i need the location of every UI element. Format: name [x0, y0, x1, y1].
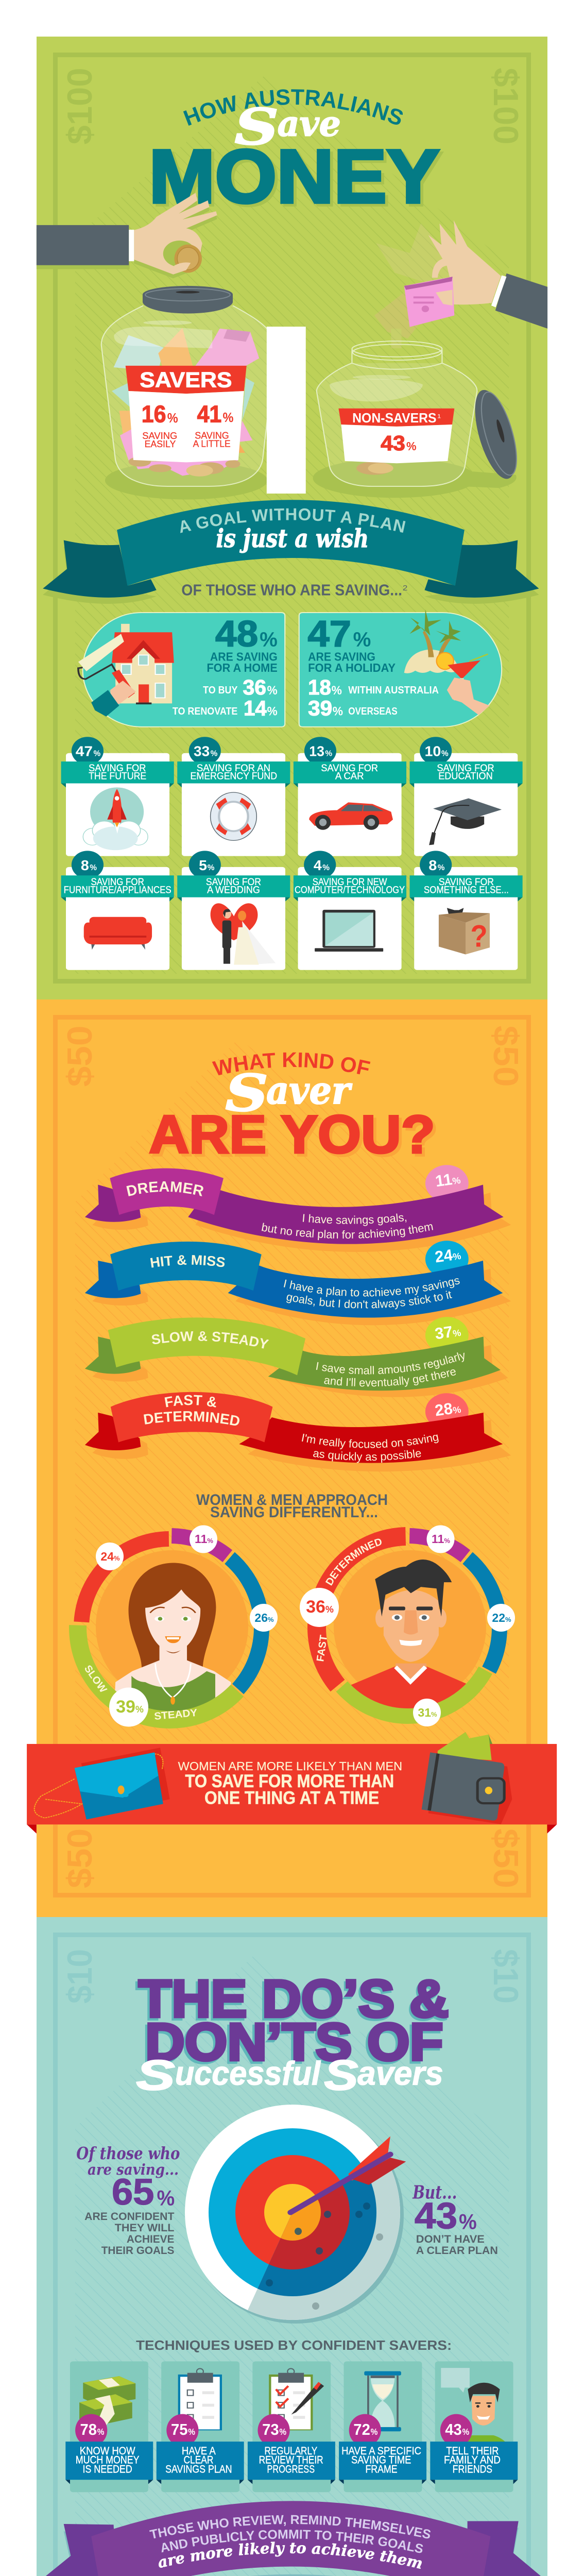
panel: the do's and don'ts of successful savers (teal): $10	[486, 1949, 525, 2004]
panel: what kind of saver are you (orange): $50	[60, 1025, 99, 1087]
technique: tell their family and friends	[430, 2414, 518, 2484]
title: the do's and don'ts of successful savers	[136, 1970, 449, 2099]
ribbon text: saver types: but no real plan for achieving them	[262, 1223, 433, 1241]
heading: women and men approach saving differently: WOMEN & MEN APPROACH	[196, 1492, 388, 1509]
technique card backgrounds and icons	[70, 2361, 513, 2492]
technique: know how much money is needed: 78	[80, 2421, 97, 2438]
text: 43% don't have a clear plan: %	[459, 2209, 477, 2234]
icon: man talking	[441, 2368, 513, 2459]
banner: a goal without a plan	[43, 500, 539, 604]
card: saving for something else: SAVING FOR	[439, 876, 494, 888]
card: saving for education: SAVING FOR	[437, 762, 494, 773]
card: saving for a wedding	[177, 851, 290, 970]
title: what kind of saver are you: aver	[266, 1069, 352, 1113]
card: saving for a car: SAVING FOR	[321, 762, 378, 773]
ribbon text: saver types: 11%	[434, 1169, 461, 1190]
illustration: savers jar: SAVING	[195, 431, 229, 441]
chart: women's saver types: STEADY	[154, 1707, 198, 1722]
text: 65% are confident: %	[157, 2185, 175, 2210]
technique: have a clear savings plan	[157, 2414, 244, 2484]
illustration: savers jar: 16	[142, 401, 166, 428]
card: saving for a wedding: %	[208, 862, 215, 872]
icon: grey wallet	[422, 1752, 512, 1824]
card: new computer or technology	[294, 851, 406, 970]
icon: mystery box with cat	[439, 908, 490, 955]
chart: women's saver types: 24%	[100, 1550, 120, 1563]
illustration: savers jar: %	[222, 410, 233, 425]
ribbon: hit and miss	[85, 1241, 511, 1325]
ribbon text: saver types: 24%	[434, 1245, 462, 1266]
ribbon text: saver types: I have savings goals,	[303, 1214, 407, 1226]
text: 65% are confident: ACHIEVE	[127, 2232, 174, 2245]
text: 65% are confident: THEY WILL	[115, 2221, 174, 2233]
chart: women's saver types: 11%	[195, 1532, 213, 1546]
heading: women and men approach saving differently	[196, 1492, 388, 1521]
technique: have a clear savings plan: 75	[171, 2421, 187, 2438]
text: 65% are confident: ARE CONFIDENT	[84, 2210, 174, 2223]
panel: saving for a home: 14	[244, 696, 267, 720]
icon: blank checklist	[178, 2368, 222, 2430]
chart: men's saver types: DETERMINED	[325, 1538, 382, 1586]
chart: men's saver types	[300, 1525, 515, 1726]
text: 65% are confident: are saving...	[88, 2161, 179, 2179]
icon: red car	[309, 802, 393, 830]
title: how Australians save money	[149, 89, 444, 222]
title: how Australians save money: HOW AUSTRALIANS	[183, 89, 403, 126]
panel: saving for a home: FOR A HOME	[207, 662, 278, 675]
technique: know how much money is needed: KNOW HOW	[80, 2444, 135, 2457]
text: women more likely	[178, 1760, 402, 1808]
text: women more likely: ONE THING AT A TIME	[204, 1788, 379, 1808]
card: new computer or technology: COMPUTER/TECHNOLOGY	[295, 884, 405, 895]
ribbon text: saver types: 28%	[434, 1398, 462, 1419]
panel: saving for a holiday: %	[353, 628, 371, 651]
panel: what kind of saver are you (orange): $50	[60, 1828, 99, 1888]
banner text: those who review, remind and commit: AND PUBLICLY COMMIT TO THEIR GOALS	[162, 2530, 423, 2553]
title: how Australians save money: S	[235, 98, 279, 156]
ribbon text: saver types: SLOW & STEADY	[151, 1331, 269, 1349]
panel: saving for a home	[78, 613, 285, 727]
title: what kind of saver are you: ARE YOU?	[152, 1107, 438, 1167]
panel: what kind of saver are you (orange)	[27, 999, 557, 1917]
chart: women's saver types: SLOW	[82, 1663, 109, 1695]
card: emergency fund: %	[211, 749, 217, 758]
panel: saving for a home: TO RENOVATE	[173, 705, 237, 717]
ribbon text: saver types: DETERMINED	[144, 1411, 239, 1426]
panel: saving for a home: %	[267, 704, 278, 718]
technique: tell their family and friends: TELL THEIR	[446, 2444, 499, 2457]
text: 43% don't have a clear plan: A CLEAR PLAN	[416, 2244, 498, 2256]
card: saving for a car: A CAR	[335, 770, 364, 782]
title: the do's and don'ts of successful savers: S	[324, 2051, 358, 2099]
banner: those who review	[40, 2501, 542, 2576]
card: saving for the future	[61, 737, 174, 856]
banner text: those who review, remind and commit: THOSE WHO REVIEW, REMIND THEMSELVES	[149, 2515, 431, 2539]
ribbon text: saver types: I'm really focused on saving	[302, 1433, 439, 1449]
icon: graduation cap	[429, 799, 502, 845]
technique: regularly review their progress: %	[279, 2427, 286, 2437]
title: the do's and don'ts of successful savers: avers	[357, 2054, 443, 2092]
illustration: savers jar: 41	[197, 401, 221, 428]
card: emergency fund: SAVING FOR AN	[197, 762, 270, 773]
title: what kind of saver are you: S	[226, 1064, 268, 1123]
chart: men's saver types: 36%	[306, 1597, 334, 1617]
title: the do's and don'ts of successful savers: DON’TS OF	[143, 2015, 441, 2074]
ribbon text: saver types: I have a plan to achieve my savings	[284, 1278, 460, 1297]
card: furniture and appliances: 8	[81, 857, 89, 873]
illustration: hand dropping a bank note	[374, 220, 547, 348]
technique: tell their family and friends: %	[462, 2427, 469, 2437]
panel: saving for a holiday	[299, 609, 502, 727]
title: the do's and don'ts of successful savers: S	[136, 2051, 175, 2099]
icon: red sofa	[84, 917, 152, 950]
card: emergency fund: EMERGENCY FUND	[191, 770, 277, 782]
card: emergency fund: 33	[194, 743, 210, 759]
card: new computer or technology: 4	[314, 857, 322, 873]
icon: money stacks	[79, 2376, 135, 2426]
panel: saving for a holiday: %	[332, 683, 342, 697]
title: what kind of saver are you: ARE YOU?	[149, 1105, 435, 1165]
illustration: savers jar: %	[167, 411, 178, 426]
panel: saving for a home: ARE SAVING	[210, 650, 278, 664]
chart: men's saver types: 11%	[432, 1532, 450, 1546]
card: emergency fund	[177, 737, 290, 856]
card: saving for something else	[410, 851, 523, 970]
card: saving for a wedding: SAVING FOR	[206, 876, 261, 888]
banner: a goal without a plan: is just a wish	[216, 523, 369, 553]
technique: tell their family and friends: 43	[445, 2421, 462, 2438]
panel: the do's and don'ts of successful savers (teal)	[37, 1917, 547, 2576]
chart: women's saver types: 26%	[254, 1611, 274, 1624]
title: the do's and don'ts of successful savers: THE DO’S &	[136, 1972, 448, 2030]
chart: men's saver types: 31%	[418, 1706, 437, 1719]
text: women more likely: WOMEN ARE MORE LIKELY THAN MEN	[178, 1760, 402, 1773]
technique: know how much money is needed: %	[97, 2427, 104, 2437]
card: furniture and appliances: SAVING FOR	[91, 876, 144, 888]
banner text: those who review, remind and commit: are more likely to achieve them	[159, 2541, 422, 2569]
ribbon: slow and steady	[85, 1317, 508, 1397]
card: saving for a car: 13	[309, 743, 324, 759]
title: the do's and don'ts of successful savers: THE DO’S &	[139, 1970, 449, 2028]
ribbon text: saver types: as quickly as possible	[313, 1450, 421, 1463]
ribbon text: saver types: 37%	[434, 1321, 462, 1343]
heading: women and men approach saving differently: SAVING DIFFERENTLY...	[210, 1504, 378, 1521]
ribbon text: saver types: goals, but I don't always stick to it	[286, 1291, 452, 1310]
ribbon text: saver types: HIT & MISS	[150, 1255, 225, 1267]
technique: have a specific saving time frame	[339, 2414, 426, 2484]
technique: regularly review their progress: REVIEW THEIR	[259, 2453, 323, 2466]
ribbon: fast and determined	[85, 1392, 511, 1471]
technique: have a clear savings plan: SAVINGS PLAN	[165, 2463, 232, 2475]
title: how Australians save money: MONEY	[149, 134, 439, 219]
text: 43% don't have a clear plan: 43	[415, 2195, 457, 2236]
icon: mystery box with cat: ?	[470, 919, 488, 954]
panel: saving for a holiday: %	[333, 704, 343, 718]
illustration: non-savers jar with open lid: NON-SAVERS	[352, 411, 437, 426]
title: how Australians save money: ave	[278, 104, 341, 144]
technique: have a clear savings plan: CLEAR	[184, 2453, 213, 2466]
illustration: non-savers jar with open lid: 1	[437, 413, 441, 419]
panel: saving for a holiday: 39	[308, 696, 332, 720]
text: 65% are confident: Of those who	[76, 2144, 180, 2164]
card: saving for something else: 8	[428, 857, 437, 873]
title: the do's and don'ts of successful savers: uccessful	[175, 2054, 321, 2092]
card: furniture and appliances	[61, 851, 174, 970]
card: saving for the future: 47	[76, 743, 93, 759]
panel: saving for a home: 36	[243, 675, 266, 699]
ribbon: dreamer	[85, 1165, 511, 1252]
banner text: those who review, remind and commit	[149, 2515, 431, 2569]
banner text: a goal without a plan: A GOAL WITHOUT A PLAN	[180, 508, 406, 533]
panel: what kind of saver are you (orange): $50	[486, 1828, 525, 1888]
technique: know how much money is needed	[65, 2414, 153, 2484]
title: what kind of saver are you: WHAT KIND OF	[212, 1052, 371, 1076]
technique: have a specific saving time frame: %	[371, 2427, 377, 2437]
panel: saving for a holiday: OVERSEAS	[348, 705, 398, 717]
text: 65% are confident: 65	[112, 2172, 154, 2213]
illustration: non-savers jar with open lid: 43	[381, 432, 405, 455]
panel: saving for a holiday: WITHIN AUSTRALIA	[348, 684, 439, 696]
banner: women save for more than one thing	[27, 1732, 557, 1834]
technique: know how much money is needed: MUCH MONEY	[76, 2453, 140, 2466]
panel: saving for a holiday: 47	[307, 613, 351, 654]
ribbon text: saver types	[126, 1169, 465, 1463]
card: saving for education: %	[441, 749, 449, 758]
text: 43% don't have a clear plan: DON’T HAVE	[416, 2232, 485, 2245]
text: 43% don't have a clear plan	[413, 2182, 498, 2256]
card: saving for a wedding: A WEDDING	[207, 884, 260, 895]
technique: regularly review their progress	[248, 2414, 335, 2484]
illustration: man portrait	[350, 1560, 470, 1717]
icon: wedding couple with heart	[211, 903, 276, 964]
technique: have a clear savings plan: HAVE A	[182, 2444, 216, 2457]
heading: of those who are saving: 2	[403, 584, 408, 592]
technique: have a specific saving time frame: SAVING TIME	[351, 2453, 411, 2466]
panel: saving for a home: 48	[215, 613, 258, 654]
technique: regularly review their progress: 73	[262, 2421, 279, 2438]
icon: hourglass	[364, 2371, 401, 2431]
icon: house being painted	[78, 624, 174, 717]
card: new computer or technology: SAVING FOR NEW	[313, 876, 387, 888]
illustration: non-savers jar with open lid: %	[406, 440, 417, 453]
panel: the do's and don'ts of successful savers (teal): $10	[60, 1949, 99, 2004]
icon: blue purse	[35, 1748, 170, 1820]
card: saving for the future: %	[94, 749, 100, 758]
technique: have a specific saving time frame: FRAME	[365, 2463, 398, 2475]
technique: have a clear savings plan: %	[188, 2427, 195, 2437]
panel: saving for a home: %	[260, 628, 278, 651]
panel: saving for a holiday: FOR A HOLIDAY	[308, 662, 396, 675]
panel: how Australians save money (green)	[36, 37, 548, 999]
panel: saving for a holiday: ARE SAVING	[308, 650, 375, 664]
text: 65% are confident: THEIR GOALS	[101, 2244, 174, 2256]
technique: know how much money is needed: IS NEEDED	[83, 2463, 132, 2475]
text: 65% are confident	[76, 2144, 180, 2256]
illustration: savers jar	[101, 286, 276, 499]
card: saving for a wedding: 5	[199, 857, 207, 873]
chart: men's saver types: FAST	[315, 1634, 330, 1663]
chart: women's saver types: 39%	[116, 1697, 144, 1717]
illustration: hand holding a coin	[37, 193, 217, 278]
card: saving for education: 10	[424, 743, 441, 759]
technique: tell their family and friends: FAMILY AND	[444, 2453, 501, 2466]
icon: palm island and cocktail	[404, 609, 490, 715]
panel: how Australians save money (green): $100	[486, 68, 525, 144]
card: saving for something else: SOMETHING ELSE...	[424, 884, 509, 895]
title: what kind of saver are you	[149, 1052, 438, 1167]
icon: ticked checklist and pen	[269, 2368, 324, 2430]
chart: target with arrow	[185, 2105, 406, 2324]
illustration: woman portrait	[114, 1563, 231, 1717]
panel: what kind of saver are you (orange): $50	[486, 1025, 525, 1087]
heading: techniques used by confident savers: TECHNIQUES USED BY CONFIDENT SAVERS:	[136, 2338, 452, 2353]
panel: how Australians save money (green): $100	[60, 68, 99, 144]
technique: regularly review their progress: REGULARLY	[264, 2444, 318, 2457]
text: 43% don't have a clear plan: But...	[413, 2182, 457, 2204]
card: saving for the future: SAVING FOR	[89, 762, 146, 773]
title: the do's and don'ts of successful savers: DON’TS OF	[145, 2013, 443, 2072]
ribbon text: saver types: DREAMER	[126, 1181, 203, 1196]
title: how Australians save money: MONEY	[152, 137, 442, 222]
card: saving for education: EDUCATION	[438, 770, 493, 782]
heading: of those who are saving: OF THOSE WHO ARE SAVING...	[181, 582, 402, 599]
card: saving for education	[410, 737, 523, 856]
card: saving for a car	[294, 737, 406, 856]
icon: rocket	[83, 787, 148, 850]
illustration: non-savers jar with open lid	[313, 341, 524, 498]
card: new computer or technology: %	[322, 862, 330, 872]
panel: saving for a home: TO BUY	[203, 684, 238, 696]
chart: men's saver types: 22%	[492, 1611, 511, 1624]
card: saving for a car: %	[325, 749, 332, 758]
illustration: savers jar: A LITTLE	[193, 439, 231, 449]
icon: life ring	[211, 792, 256, 840]
icon: laptop	[315, 910, 383, 952]
card: furniture and appliances: %	[90, 862, 97, 872]
arrow	[290, 2136, 406, 2212]
text: women more likely: TO SAVE FOR MORE THAN	[185, 1771, 394, 1791]
panel: saving for a holiday: 18	[308, 675, 331, 699]
card: saving for something else: %	[438, 862, 445, 872]
illustration: savers jar: EASILY	[145, 439, 176, 450]
technique: have a specific saving time frame: HAVE A SPECIFIC	[341, 2444, 421, 2457]
ribbon text: saver types: I save small amounts regularly	[316, 1352, 465, 1375]
chart: women's saver types	[78, 1525, 278, 1727]
white gap bar	[267, 327, 306, 494]
technique: regularly review their progress: PROGRESS	[267, 2463, 315, 2475]
card: saving for the future: THE FUTURE	[89, 770, 146, 782]
technique: tell their family and friends: FRIENDS	[453, 2463, 492, 2475]
ribbon text: saver types: and I'll eventually get there	[324, 1369, 456, 1387]
card: furniture and appliances: FURNITURE/APPLIANCES	[64, 884, 171, 895]
ribbon text: saver types: FAST &	[165, 1395, 216, 1408]
illustration: savers jar: SAVERS	[140, 367, 232, 392]
technique: have a specific saving time frame: 72	[353, 2421, 370, 2438]
panel: saving for a home: %	[267, 683, 278, 697]
illustration: savers jar: SAVING	[142, 431, 177, 442]
